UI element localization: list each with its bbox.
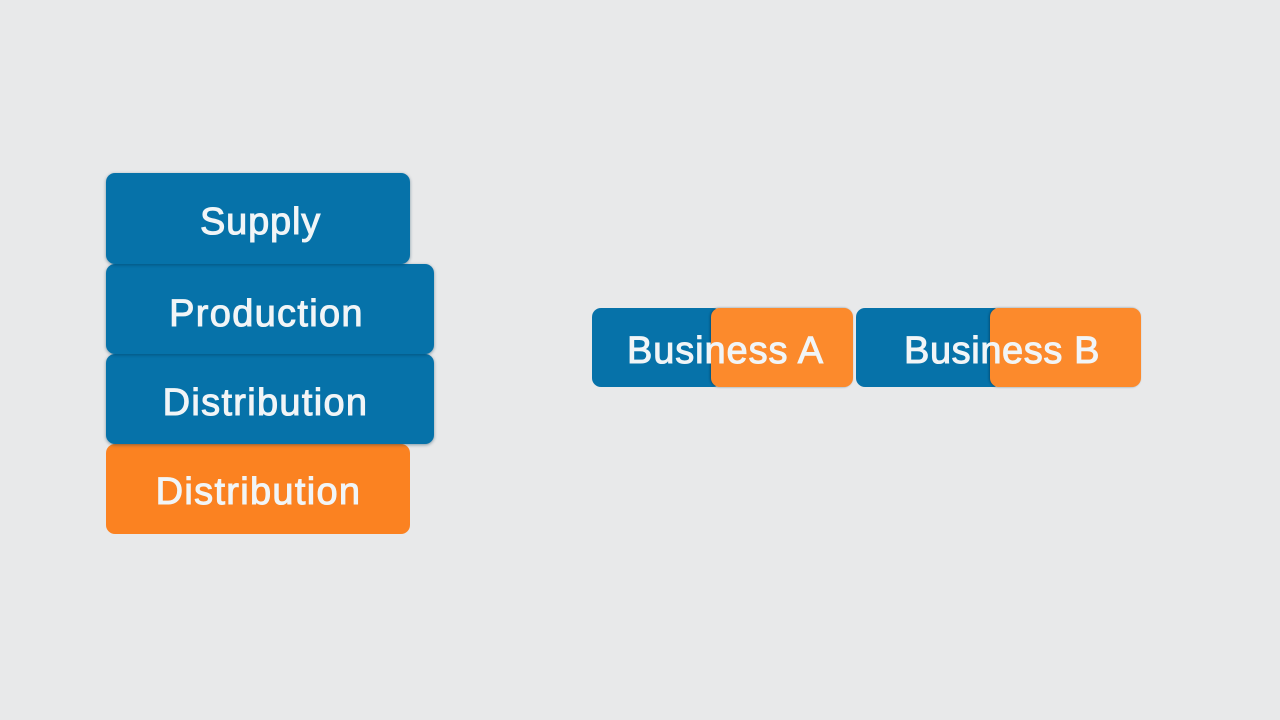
block: production (106, 264, 434, 354)
label: distribution blue: Distribution (163, 382, 368, 424)
label: business A: Business A (627, 330, 824, 372)
label: business B: Business B (904, 330, 1100, 372)
block: distribution orange (106, 444, 410, 534)
block: business A blue (592, 308, 722, 387)
block: business B orange (990, 308, 1141, 387)
block: distribution blue (106, 354, 434, 444)
block: supply (106, 173, 410, 264)
label: distribution orange: Distribution (156, 471, 361, 513)
panel: stacked value chain (104, 172, 436, 534)
block: business A orange (711, 308, 853, 387)
label: production: Production (169, 293, 364, 335)
block: business B blue (856, 308, 1002, 387)
panel: business A (592, 306, 854, 388)
label: supply: Supply (200, 201, 321, 243)
panel: business B (856, 306, 1142, 388)
